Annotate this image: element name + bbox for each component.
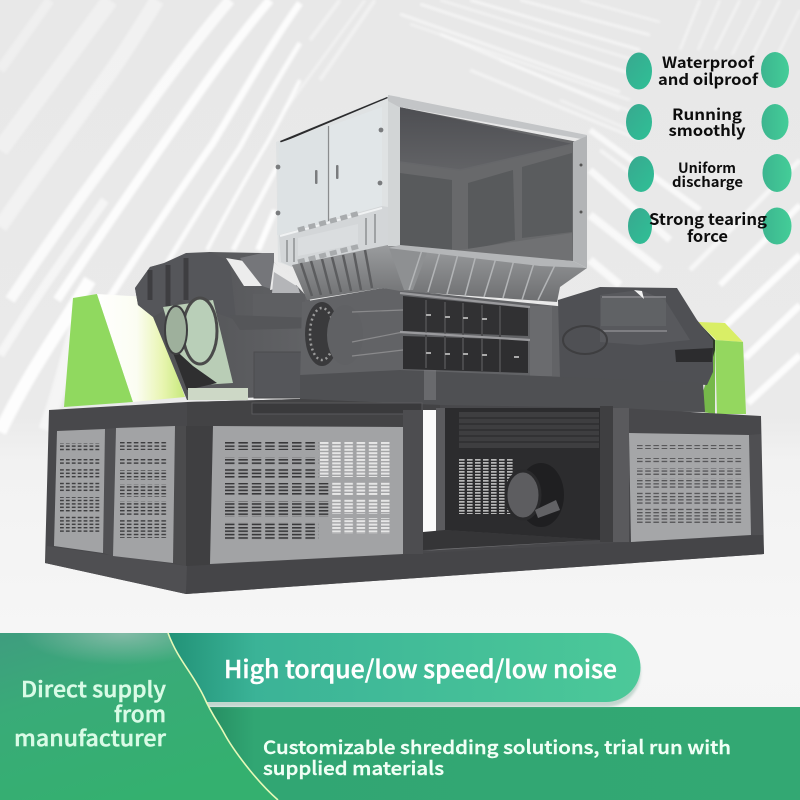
hopper left side panels — [276, 96, 388, 267]
left gearbox — [135, 252, 320, 400]
cutter openings — [400, 293, 552, 376]
right green guard — [698, 322, 746, 414]
lower machine bed — [300, 370, 705, 412]
door handles and bolts — [276, 128, 383, 215]
feature: waterproof and oilproof: and oilproof — [658, 68, 759, 90]
lower green band — [180, 707, 800, 800]
direct supply block: Direct supply — [21, 673, 166, 704]
feature list — [626, 51, 792, 247]
shredder machine illustration — [45, 95, 764, 594]
feature: strong tearing force: force — [687, 223, 728, 247]
feature: uniform discharge — [628, 154, 792, 192]
vented panel 1 — [54, 429, 105, 553]
feature: waterproof and oilproof: Waterproof — [662, 51, 755, 73]
direct supply block: from — [114, 698, 166, 729]
torque pill: High torque/low speed/low noise — [224, 651, 617, 686]
funnel — [292, 245, 587, 302]
direct supply block: manufacturer — [14, 722, 166, 753]
hopper front frame — [388, 95, 587, 268]
customization note — [263, 734, 731, 781]
customization note: Customizable shredding solutions, trial run with — [263, 734, 731, 760]
right gearbox — [558, 287, 713, 385]
bolted flange — [305, 302, 363, 366]
cutter box — [300, 288, 567, 385]
feature: running smoothly: Running — [672, 103, 742, 125]
vented panel 4 — [629, 433, 751, 542]
base frame — [45, 399, 764, 594]
hopper — [276, 95, 587, 302]
torque pill — [160, 633, 640, 707]
feature: strong tearing force: Strong tearing — [649, 206, 767, 230]
hopper interior — [399, 107, 578, 261]
feature: uniform discharge: discharge — [672, 172, 743, 192]
hopper ribs — [279, 206, 388, 267]
gap and interior — [423, 408, 600, 551]
customization note: supplied materials — [263, 755, 444, 781]
feature: running smoothly: smoothly — [668, 119, 746, 141]
right column — [600, 406, 613, 542]
feature: waterproof and oilproof — [626, 51, 789, 90]
vented panel 2 — [113, 426, 175, 563]
direct supply block — [0, 633, 278, 800]
feature: running smoothly — [626, 103, 788, 141]
left green guard — [64, 294, 185, 407]
feature: strong tearing force — [628, 206, 792, 247]
bottom banner — [0, 633, 800, 800]
vented panel 3 — [210, 426, 403, 564]
feature: uniform discharge: Uniform — [678, 158, 736, 178]
